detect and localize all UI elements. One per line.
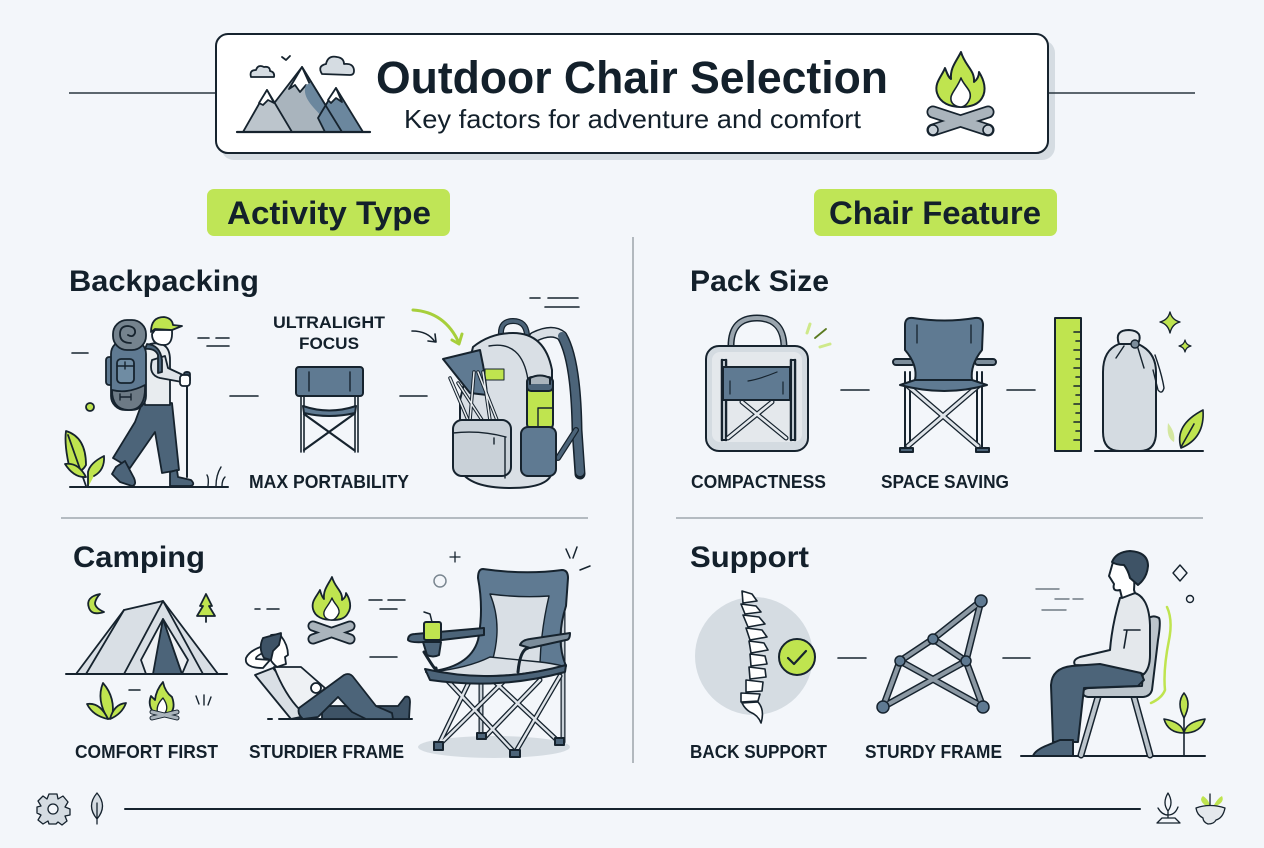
- icon: hiker with backpack: [65, 317, 228, 487]
- connector dashes: [838, 657, 1030, 659]
- subtitle: Key factors for adventure and comfort: [404, 104, 862, 134]
- icon: campfire: [928, 52, 993, 135]
- icon: folding chair: [893, 318, 996, 452]
- title: Outdoor Chair Selection: [376, 52, 888, 103]
- connector dashes: [255, 600, 405, 657]
- icon: potted plant: [1196, 794, 1225, 824]
- icon: seated person on chair: [1021, 551, 1205, 756]
- icon: tent scene: [66, 594, 227, 719]
- badge: Activity Type: [207, 189, 450, 236]
- badge: Chair Feature: Chair Feature: [829, 195, 1041, 231]
- icon: mountains with clouds: [237, 56, 370, 132]
- panel: Camping: [66, 541, 590, 762]
- label: Sturdy Frame: STURDY FRAME: [865, 742, 1002, 762]
- label: Ultralight Focus: ULTRALIGHT: [273, 313, 386, 332]
- panel: Pack Size: [690, 265, 1203, 492]
- badge: Chair Feature: [814, 189, 1057, 236]
- label: Space Saving: SPACE SAVING: [881, 472, 1009, 492]
- panel: Support: [690, 541, 1205, 762]
- label: Back Support: BACK SUPPORT: [690, 742, 827, 762]
- heading: Support: Support: [690, 541, 809, 574]
- icon: spine with check badge: [695, 591, 815, 723]
- heading: Pack Size: Pack Size: [690, 265, 829, 298]
- heading: Camping: Camping: [73, 541, 205, 574]
- icon: ultralight chair: [296, 367, 363, 452]
- badge: Activity Type: Activity Type: [227, 195, 431, 231]
- heading: Backpacking: Backpacking: [69, 265, 259, 298]
- label: Ultralight Focus: [273, 313, 386, 353]
- label: Ultralight Focus: FOCUS: [299, 334, 359, 353]
- icon: camping chair with cup holder: [408, 547, 590, 758]
- connector dashes: [841, 389, 1035, 391]
- icon: backpack with chair: [412, 310, 580, 488]
- connector dashes: [72, 298, 579, 396]
- label: Comfort First: COMFORT FIRST: [75, 742, 218, 762]
- footer bar: [37, 793, 1225, 825]
- icon: gear: [37, 794, 70, 825]
- icon: sprout: [1157, 793, 1180, 823]
- icon: leaf: [92, 793, 102, 824]
- icon: stuff sack: [1095, 312, 1203, 451]
- label: Compactness: COMPACTNESS: [691, 472, 826, 492]
- icon: campfire and reclining man: [246, 577, 412, 719]
- panel: Backpacking: [65, 265, 580, 492]
- icon: green ruler: [1055, 318, 1081, 451]
- label: Sturdier Frame: STURDIER FRAME: [249, 742, 404, 762]
- icon: sturdy frame: [877, 595, 989, 713]
- label: Max Portability: MAX PORTABILITY: [249, 472, 409, 492]
- header banner: [69, 34, 1195, 160]
- icon: chair in carry bag: [706, 318, 830, 451]
